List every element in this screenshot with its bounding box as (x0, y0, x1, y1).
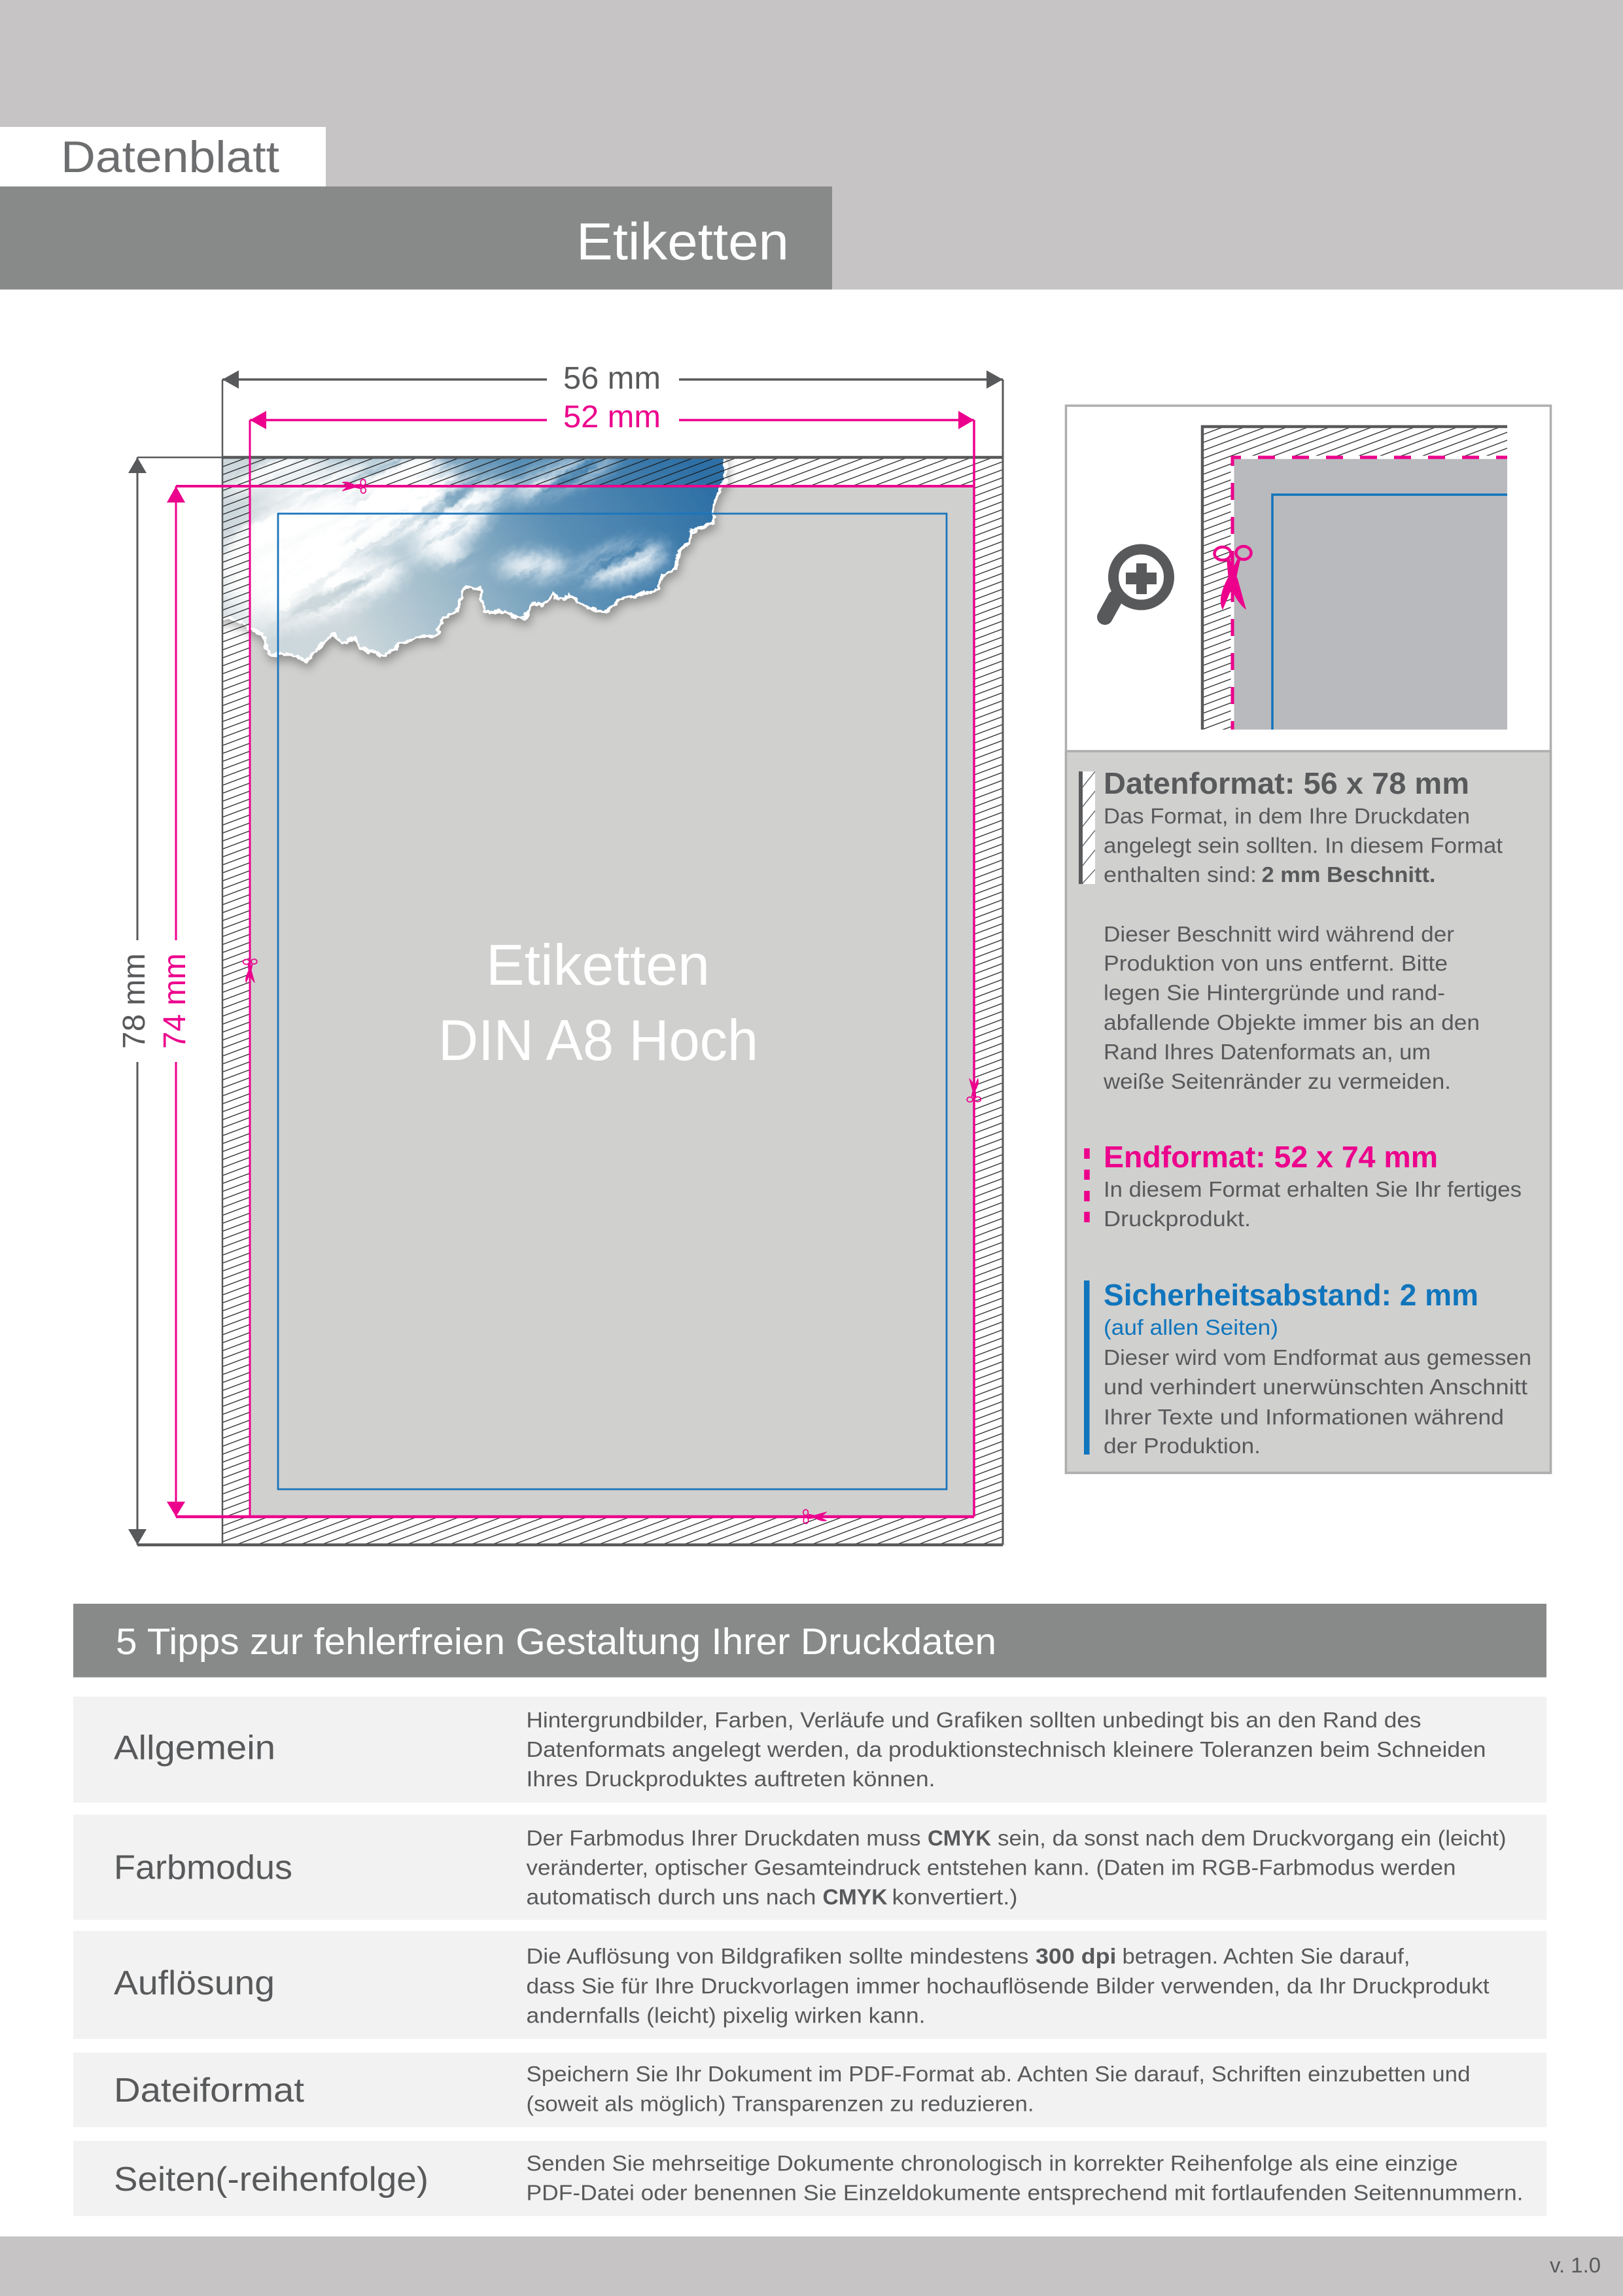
legend: Datenformat: abfallende Objekte immer bis an den (1104, 1010, 1480, 1034)
dimension: 74 mm: 74 mm (158, 953, 192, 1049)
tip: Auflösung (73, 1931, 1546, 2039)
safety margin rectangle (278, 514, 947, 1489)
tip: Auflösung: andernfalls (leicht) pixelig wirken kann. (526, 2004, 925, 2027)
legend: Datenformat (1079, 766, 1503, 1093)
tip: Allgemein: Ihres Druckproduktes auftreten können. (526, 1767, 935, 1791)
tip: Dateiformat: Dateiformat (114, 2072, 305, 2110)
label title: DIN A8 Hoch (438, 1008, 758, 1072)
dimension: 52 mm: 52 mm (563, 400, 661, 434)
header bar: Etiketten (0, 186, 832, 289)
icon: scissors bottom (803, 1510, 828, 1523)
tip: Farbmodus: CMYK (928, 1826, 991, 1850)
label trim area (250, 486, 974, 1517)
tip: Farbmodus: automatisch durch uns nach (526, 1884, 816, 1909)
tips heading (73, 1604, 1546, 1678)
legend: Sicherheitsabstand: Dieser wird vom Endformat aus gemessen (1104, 1345, 1531, 1369)
footer band with version: v. 1.0 (1550, 2253, 1601, 2277)
legend: Sicherheitsabstand: (auf allen Seiten) (1104, 1315, 1278, 1339)
header bar: Etiketten: Etiketten (576, 212, 789, 271)
icon: scissors right (967, 1078, 981, 1102)
header band (0, 0, 1623, 289)
legend: Sicherheitsabstand: und verhindert unerwünschten Anschnitt (1104, 1375, 1527, 1399)
tip: Auflösung: betragen. Achten Sie darauf, (1123, 1944, 1410, 1968)
tip: Allgemein: Datenformats angelegt werden, da produktionstechnisch kleinere Toleranzen beim Schneiden (526, 1737, 1486, 1761)
tip: Seiten(-reihenfolge) (73, 2141, 1546, 2216)
dimension: 52 mm (250, 400, 974, 434)
dimension: 56 mm (222, 361, 1003, 396)
label title: Etiketten (486, 932, 710, 997)
tip: Allgemein (73, 1697, 1546, 1803)
legend: Sicherheitsabstand: der Produktion. (1104, 1434, 1261, 1458)
legend: Datenformat: Rand Ihres Datenformats an, um (1104, 1040, 1431, 1064)
tip: Dateiformat (73, 2053, 1546, 2127)
tip: Farbmodus (73, 1815, 1546, 1920)
torn sky photo (223, 459, 735, 672)
format diagram (112, 233, 1003, 1545)
icon: scissors left (243, 959, 257, 983)
legend: Endformat (1087, 1140, 1522, 1231)
icon: scissors detail (1214, 546, 1251, 610)
icon: hatch strip (1079, 771, 1095, 884)
tip: Auflösung: Die Auflösung von Bildgrafiken sollte mindestens (526, 1944, 1028, 1968)
end format frame lines (176, 420, 974, 1517)
legend: Datenformat: weiße Seitenränder zu vermeiden. (1103, 1069, 1451, 1093)
legend: Endformat: Endformat: 52 x 74 mm (1104, 1140, 1438, 1174)
tips heading: 5 Tipps zur fehlerfreien Gestaltung Ihrer Druckdaten (116, 1621, 996, 1663)
footer band with version (0, 2236, 1623, 2296)
tip: Farbmodus: konvertiert.) (892, 1884, 1018, 1909)
tip: Seiten(-reihenfolge): Senden Sie mehrseitige Dokumente chronologisch in korrekter Reihenfolge als eine einzige (526, 2151, 1457, 2175)
legend: Datenformat: legen Sie Hintergründe und rand- (1104, 980, 1445, 1005)
legend: Datenformat: enthalten sind: (1104, 862, 1257, 887)
tip: Farbmodus: Farbmodus (114, 1849, 292, 1887)
dimension: 78 mm (117, 457, 152, 1545)
bleed area background (222, 457, 1003, 1545)
legend: Sicherheitsabstand (1084, 1278, 1531, 1458)
legend: Endformat: In diesem Format erhalten Sie Ihr fertiges (1104, 1177, 1522, 1201)
legend: Datenformat: Produktion von uns entfernt. Bitte (1104, 951, 1448, 975)
detail corner drawing (1202, 427, 1507, 730)
data format frame lines (137, 380, 1003, 1545)
legend: Datenformat: Das Format, in dem Ihre Druckdaten (1104, 804, 1470, 828)
legend: Sicherheitsabstand: Sicherheitsabstand: 2 mm (1104, 1278, 1478, 1312)
tip: Auflösung: 300 dpi (1036, 1944, 1116, 1968)
header tab: Datenblatt: Datenblatt (61, 132, 279, 182)
header tab: Datenblatt (0, 127, 326, 187)
label title (438, 932, 758, 1072)
tip: Allgemein: Hintergrundbilder, Farben, Verläufe und Grafiken sollten unbedingt bis an den Rand des (526, 1708, 1421, 1732)
tip: Dateiformat: (soweit als möglich) Transparenzen zu reduzieren. (526, 2091, 1034, 2116)
icon: magnifier (1105, 550, 1169, 617)
legend: Sicherheitsabstand: Ihrer Texte und Informationen während (1104, 1405, 1504, 1429)
tip: Farbmodus: CMYK (823, 1884, 888, 1909)
tip: Farbmodus: veränderter, optischer Gesamteindruck entstehen kann. (Daten im RGB-Farbmodus werden (526, 1856, 1456, 1879)
dimension: 74 mm (158, 486, 192, 1517)
tip: Auflösung: Auflösung (114, 1964, 275, 2002)
icon: scissors top (341, 480, 366, 493)
dimension: 56 mm: 56 mm (563, 361, 661, 396)
tip: Farbmodus: Der Farbmodus Ihrer Druckdaten muss (526, 1826, 921, 1850)
tip: Farbmodus: sein, da sonst nach dem Druckvorgang ein (leicht) (998, 1826, 1506, 1850)
tip: Allgemein: Allgemein (114, 1729, 275, 1767)
tip: Seiten(-reihenfolge): PDF-Datei oder benennen Sie Einzeldokumente entsprechend mit fortlaufenden Seitennummern. (526, 2180, 1523, 2205)
tip: Auflösung: dass Sie für Ihre Druckvorlagen immer hochauflösende Bilder verwenden, da Ihr Druckprodukt (526, 1973, 1489, 1998)
tip: Seiten(-reihenfolge): Seiten(-reihenfolge) (114, 2161, 428, 2199)
legend: Datenformat: angelegt sein sollten. In diesem Format (1104, 834, 1503, 857)
legend: Datenformat: Datenformat: 56 x 78 mm (1104, 766, 1469, 800)
bleed hatching (222, 457, 1003, 1545)
tip: Dateiformat: Speichern Sie Ihr Dokument im PDF-Format ab. Achten Sie darauf, Schriften einzubetten und (526, 2062, 1471, 2086)
panel: zoom detail (1105, 427, 1507, 730)
dimension: 78 mm: 78 mm (117, 953, 152, 1049)
panel: legend background (1066, 751, 1550, 1473)
panel: explanation (1066, 406, 1550, 1473)
legend: Endformat: Druckprodukt. (1104, 1207, 1251, 1231)
legend: Datenformat: 2 mm Beschnitt. (1261, 862, 1435, 887)
legend: Datenformat: Dieser Beschnitt wird während der (1104, 922, 1454, 946)
